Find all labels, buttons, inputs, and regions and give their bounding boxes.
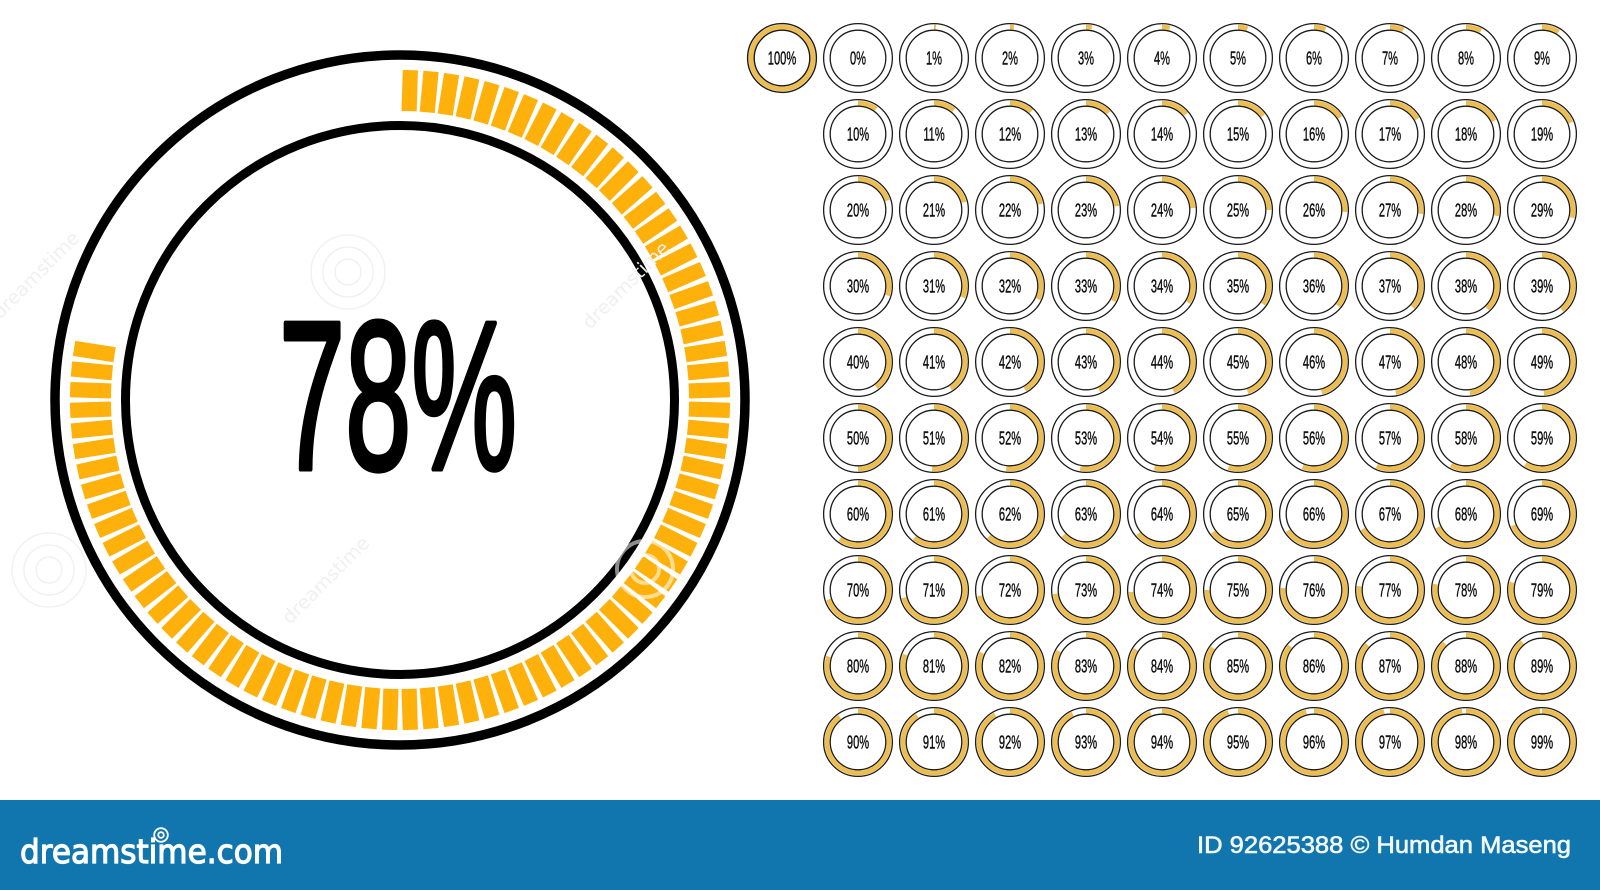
gauge: 9%: 9% [1534, 49, 1550, 70]
gauge: 86% [1280, 632, 1348, 700]
gauge: 91%: 91% [923, 733, 945, 754]
gauge: 92% [976, 708, 1044, 776]
gauge: 4% [1128, 24, 1196, 92]
large percentage label: 78% [279, 277, 517, 514]
gauge: 33% [1052, 252, 1120, 320]
gauge: 49%: 49% [1531, 353, 1553, 374]
gauge: 53%: 53% [1075, 429, 1097, 450]
gauge: 7%: 7% [1382, 49, 1398, 70]
gauge: 97%: 97% [1379, 733, 1401, 754]
gauge: 14% [1128, 100, 1196, 168]
gauge: 28%: 28% [1455, 201, 1477, 222]
gauge: 2% [976, 24, 1044, 92]
gauge: 37% [1356, 252, 1424, 320]
gauge: 13%: 13% [1075, 125, 1097, 146]
faint watermarks: dreamstime [578, 237, 674, 334]
gauge: 57% [1356, 404, 1424, 472]
gauge: 45% [1204, 328, 1272, 396]
outer ring [55, 55, 745, 745]
gauge: 27%: 27% [1379, 201, 1401, 222]
gauge: 42%: 42% [999, 353, 1021, 374]
gauge: 41% [900, 328, 968, 396]
gauge: 53% [1052, 404, 1120, 472]
image credit: ID 92625388 © Humdan Maseng [1197, 832, 1571, 859]
segmented progress bar [70, 70, 730, 730]
gauge: 31% [900, 252, 968, 320]
gauge: 50% [824, 404, 892, 472]
gauge: 18%: 18% [1455, 125, 1477, 146]
gauge: 11% [900, 100, 968, 168]
gauge: 98%: 98% [1455, 733, 1477, 754]
gauge: 19% [1508, 100, 1576, 168]
gauge: 16%: 16% [1303, 125, 1325, 146]
gauge: 72%: 72% [999, 581, 1021, 602]
gauge: 11%: 11% [923, 125, 945, 146]
gauge: 95%: 95% [1227, 733, 1249, 754]
gauge: 79%: 79% [1531, 581, 1553, 602]
gauge: 77% [1356, 556, 1424, 624]
gauge: 76% [1280, 556, 1348, 624]
gauge: 91% [900, 708, 968, 776]
gauge: 31%: 31% [923, 277, 945, 298]
gauge: 58% [1432, 404, 1500, 472]
gauge: 56%: 56% [1303, 429, 1325, 450]
gauge: 79% [1508, 556, 1576, 624]
gauge: 90% [824, 708, 892, 776]
gauge: 80%: 80% [847, 657, 869, 678]
gauge: 81%: 81% [923, 657, 945, 678]
gauge: 22%: 22% [999, 201, 1021, 222]
gauge: 97% [1356, 708, 1424, 776]
gauge: 98% [1432, 708, 1500, 776]
gauge: 33%: 33% [1075, 277, 1097, 298]
gauge: 99%: 99% [1531, 733, 1553, 754]
gauge: 65% [1204, 480, 1272, 548]
gauge: 62% [976, 480, 1044, 548]
gauge: 54% [1128, 404, 1196, 472]
gauge: 46%: 46% [1303, 353, 1325, 374]
gauge: 6% [1280, 24, 1348, 92]
gauge: 60% [824, 480, 892, 548]
gauge: 94%: 94% [1151, 733, 1173, 754]
gauge: 4%: 4% [1154, 49, 1170, 70]
gauge: 30% [824, 252, 892, 320]
gauge: 61%: 61% [923, 505, 945, 526]
gauge: 67%: 67% [1379, 505, 1401, 526]
gauge: 10%: 10% [847, 125, 869, 146]
gauge: 22% [976, 176, 1044, 244]
gauge: 52%: 52% [999, 429, 1021, 450]
gauge: 35%: 35% [1227, 277, 1249, 298]
footer logo: dreamstime.com [20, 832, 283, 871]
gauge: 95% [1204, 708, 1272, 776]
gauge: 80% [824, 632, 892, 700]
gauge: 8% [1432, 24, 1500, 92]
gauge: 23% [1052, 176, 1120, 244]
gauge: 14%: 14% [1151, 125, 1173, 146]
gauge: 28% [1432, 176, 1500, 244]
gauge: 93% [1052, 708, 1120, 776]
gauge: 29%: 29% [1531, 201, 1553, 222]
gauge: 99% [1508, 708, 1576, 776]
gauge: 75% [1204, 556, 1272, 624]
gauge: 85% [1204, 632, 1272, 700]
gauge: 26% [1280, 176, 1348, 244]
gauge: 94% [1128, 708, 1196, 776]
gauge: 1%: 1% [926, 49, 942, 70]
gauge: 82%: 82% [999, 657, 1021, 678]
gauge: 57%: 57% [1379, 429, 1401, 450]
gauge: 54%: 54% [1151, 429, 1173, 450]
gauge: 69% [1508, 480, 1576, 548]
gauge: 46% [1280, 328, 1348, 396]
gauge: 5% [1204, 24, 1272, 92]
gauge: 69%: 69% [1531, 505, 1553, 526]
gauge: 88%: 88% [1455, 657, 1477, 678]
gauge: 56% [1280, 404, 1348, 472]
gauge: 63% [1052, 480, 1120, 548]
gauge: 41%: 41% [923, 353, 945, 374]
gauge: 62%: 62% [999, 505, 1021, 526]
gauge: 3%: 3% [1078, 49, 1094, 70]
gauge: 40% [824, 328, 892, 396]
gauge: 87% [1356, 632, 1424, 700]
gauge: 71% [900, 556, 968, 624]
gauge: 24%: 24% [1151, 201, 1173, 222]
gauge: 88% [1432, 632, 1500, 700]
faint watermarks [0, 227, 674, 629]
gauge: 50%: 50% [847, 429, 869, 450]
gauge: 51%: 51% [923, 429, 945, 450]
gauge: 74% [1128, 556, 1196, 624]
gauge: 52% [976, 404, 1044, 472]
gauge: 21% [900, 176, 968, 244]
gauge: 78% [1432, 556, 1500, 624]
gauge: 12%: 12% [999, 125, 1021, 146]
gauge: 42% [976, 328, 1044, 396]
gauge: 82% [976, 632, 1044, 700]
gauge: 36% [1280, 252, 1348, 320]
footer bar [0, 800, 1600, 890]
gauge: 17%: 17% [1379, 125, 1401, 146]
gauge: 17% [1356, 100, 1424, 168]
gauge: 67% [1356, 480, 1424, 548]
gauge: 12% [976, 100, 1044, 168]
gauge: 16% [1280, 100, 1348, 168]
gauge: 1% [900, 24, 968, 92]
gauge: 5%: 5% [1230, 49, 1246, 70]
gauge: 32%: 32% [999, 277, 1021, 298]
gauge: 78%: 78% [1455, 581, 1477, 602]
gauge: 85%: 85% [1227, 657, 1249, 678]
gauge: 100%: 100% [768, 49, 797, 70]
gauge: 100% [748, 24, 816, 92]
gauge: 89% [1508, 632, 1576, 700]
icon: logo swirl [154, 828, 168, 842]
gauge: 55% [1204, 404, 1272, 472]
gauge: 73% [1052, 556, 1120, 624]
gauge: 84%: 84% [1151, 657, 1173, 678]
gauge: 27% [1356, 176, 1424, 244]
gauge: 36%: 36% [1303, 277, 1325, 298]
gauge: 39% [1508, 252, 1576, 320]
gauge: 73%: 73% [1075, 581, 1097, 602]
gauge: 40%: 40% [847, 353, 869, 374]
gauge: 7% [1356, 24, 1424, 92]
gauge: 49% [1508, 328, 1576, 396]
gauge: 89%: 89% [1531, 657, 1553, 678]
gauge: 6%: 6% [1306, 49, 1322, 70]
gauge: 29% [1508, 176, 1576, 244]
gauge: 51% [900, 404, 968, 472]
gauge: 38% [1432, 252, 1500, 320]
gauge: 93%: 93% [1075, 733, 1097, 754]
gauge: 59%: 59% [1531, 429, 1553, 450]
gauge: 87%: 87% [1379, 657, 1401, 678]
gauge: 65%: 65% [1227, 505, 1249, 526]
gauge: 83% [1052, 632, 1120, 700]
gauge: 0%: 0% [850, 49, 866, 70]
gauge: 30%: 30% [847, 277, 869, 298]
gauge: 35% [1204, 252, 1272, 320]
gauge: 68%: 68% [1455, 505, 1477, 526]
gauge: 15% [1204, 100, 1272, 168]
gauge: 9% [1508, 24, 1576, 92]
gauge: 66% [1280, 480, 1348, 548]
gauge: 64%: 64% [1151, 505, 1173, 526]
gauge: 72% [976, 556, 1044, 624]
gauge: 81% [900, 632, 968, 700]
gauge: 64% [1128, 480, 1196, 548]
gauge: 66%: 66% [1303, 505, 1325, 526]
gauge: 43%: 43% [1075, 353, 1097, 374]
gauge: 48% [1432, 328, 1500, 396]
gauge: 8%: 8% [1458, 49, 1474, 70]
gauge: 77%: 77% [1379, 581, 1401, 602]
gauge: 74%: 74% [1151, 581, 1173, 602]
gauge: 20%: 20% [847, 201, 869, 222]
gauge: 83%: 83% [1075, 657, 1097, 678]
gauge: 55%: 55% [1227, 429, 1249, 450]
gauge: 76%: 76% [1303, 581, 1325, 602]
gauge: 20% [824, 176, 892, 244]
gauge: 44% [1128, 328, 1196, 396]
inner ring [126, 126, 674, 674]
gauge: 44%: 44% [1151, 353, 1173, 374]
gauge: 3% [1052, 24, 1120, 92]
gauge: 61% [900, 480, 968, 548]
gauge: 43% [1052, 328, 1120, 396]
gauge: 59% [1508, 404, 1576, 472]
gauge: 48%: 48% [1455, 353, 1477, 374]
gauge: 10% [824, 100, 892, 168]
gauge: 15%: 15% [1227, 125, 1249, 146]
gauge: 68% [1432, 480, 1500, 548]
gauge: 25% [1204, 176, 1272, 244]
gauge: 13% [1052, 100, 1120, 168]
gauge: 34% [1128, 252, 1196, 320]
gauge: 86%: 86% [1303, 657, 1325, 678]
gauge: 25%: 25% [1227, 201, 1249, 222]
faint watermarks: dreamstime [278, 532, 374, 629]
gauge: 26%: 26% [1303, 201, 1325, 222]
gauge: 70% [824, 556, 892, 624]
gauge: 0% [824, 24, 892, 92]
gauge: 19%: 19% [1531, 125, 1553, 146]
gauge: 60%: 60% [847, 505, 869, 526]
gauge: 90%: 90% [847, 733, 869, 754]
gauge: 92%: 92% [999, 733, 1021, 754]
gauge: 84% [1128, 632, 1196, 700]
gauge: 32% [976, 252, 1044, 320]
gauge: 24% [1128, 176, 1196, 244]
gauge: 39%: 39% [1531, 277, 1553, 298]
gauge: 37%: 37% [1379, 277, 1401, 298]
gauge: 63%: 63% [1075, 505, 1097, 526]
gauge: 18% [1432, 100, 1500, 168]
gauge: 2%: 2% [1002, 49, 1018, 70]
gauge: 75%: 75% [1227, 581, 1249, 602]
gauge: 96%: 96% [1303, 733, 1325, 754]
gauge: 38%: 38% [1455, 277, 1477, 298]
gauge: 47%: 47% [1379, 353, 1401, 374]
gauge: 23%: 23% [1075, 201, 1097, 222]
gauge: 71%: 71% [923, 581, 945, 602]
gauge: 21%: 21% [923, 201, 945, 222]
gauge grid [748, 24, 1576, 776]
gauge: 47% [1356, 328, 1424, 396]
gauge: 45%: 45% [1227, 353, 1249, 374]
gauge: 70%: 70% [847, 581, 869, 602]
gauge: 34%: 34% [1151, 277, 1173, 298]
gauge: 96% [1280, 708, 1348, 776]
gauge: 58%: 58% [1455, 429, 1477, 450]
large gauge: 78% [55, 55, 745, 745]
